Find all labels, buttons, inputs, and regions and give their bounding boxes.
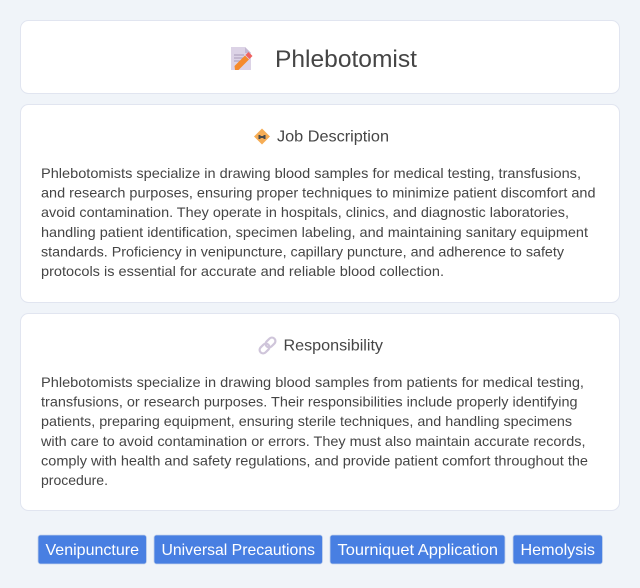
tag: Hemolysis: Hemolysis [520, 542, 595, 559]
icon: chain link [258, 336, 277, 355]
tag: Universal Precautions [154, 535, 322, 564]
text block: responsibility: comply with health and safety regulations, and provide patient comfort throughout the [41, 452, 588, 468]
text block: responsibility: procedure. [41, 472, 108, 488]
panel: responsibility [20, 314, 620, 510]
text block: job description: and research purposes, ensuring proper techniques to minimize patient discomfort and [41, 185, 596, 201]
tag: Universal Precautions: Universal Precautions [162, 542, 315, 559]
icon: document with pencil [231, 47, 252, 70]
text block: job description: handling patient identification, specimen labeling, and maintaining sanitary equipment [41, 224, 588, 240]
text block: job description: avoid contamination. They operate in hospitals, clinics, and diagnostic laboratories, [41, 204, 569, 220]
panel: job description [20, 104, 620, 302]
heading: responsibility: Responsibility [284, 338, 383, 354]
text block: responsibility [40, 374, 588, 488]
tag: Hemolysis [513, 535, 602, 564]
tag: Venipuncture: Venipuncture [46, 542, 139, 559]
tag: Tourniquet Application [330, 535, 505, 564]
panel: title card [20, 20, 620, 94]
tag: Tourniquet Application: Tourniquet Application [338, 542, 498, 559]
text block: responsibility: Phlebotomists specialize in drawing blood samples from patients for medical testing, [41, 374, 584, 390]
text block: job description: protocols is essential for accurate and reliable blood collection. [41, 263, 444, 279]
text block: job description: standards. Proficiency in venipuncture, capillary puncture, and adherence to safety [41, 243, 564, 259]
text block: responsibility: with care to avoid contamination or errors. They must also maintain accurate records, [40, 433, 586, 449]
tag: Venipuncture [38, 535, 146, 564]
text block: responsibility: patients, preparing equipment, ensuring sterile techniques, and handling specimens [41, 413, 572, 429]
title: Phlebotomist [275, 46, 417, 73]
text block: job description [41, 165, 596, 279]
icon: diamond sign [254, 128, 270, 144]
text block: responsibility: transfusions, or research purposes. Their responsibilities include properly identifying [41, 394, 578, 410]
text block: job description: Phlebotomists specialize in drawing blood samples for medical testing, transfusions, [41, 165, 581, 181]
heading: job description: Job Description [277, 128, 389, 146]
